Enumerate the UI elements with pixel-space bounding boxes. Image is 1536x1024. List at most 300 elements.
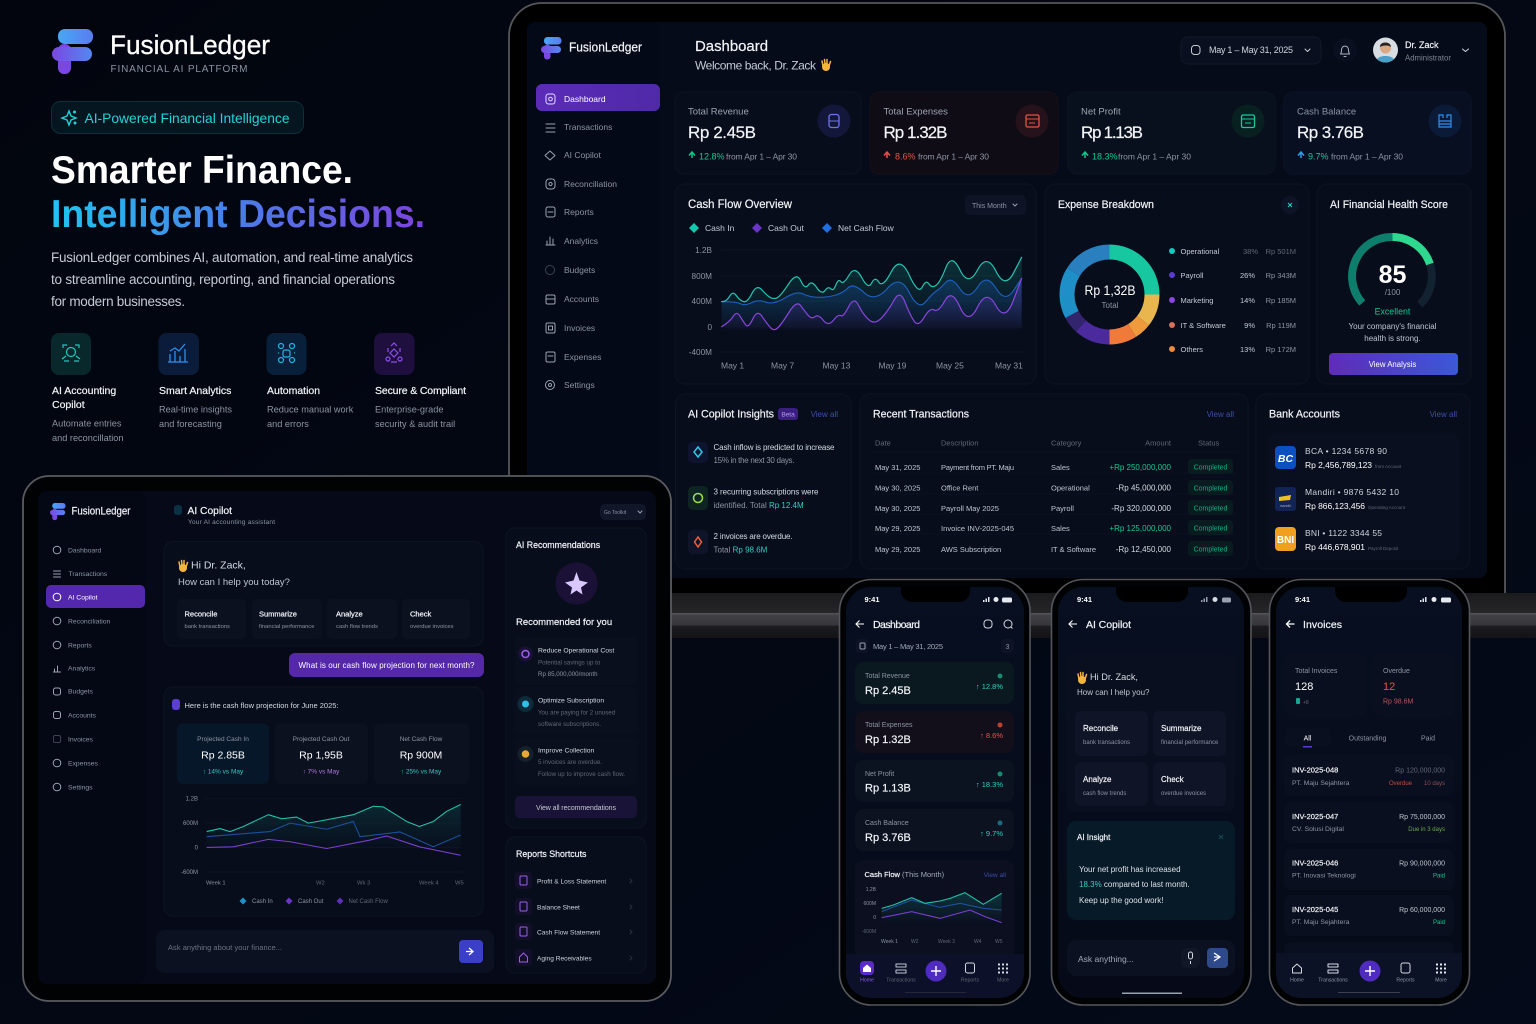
beta badge: Beta <box>781 412 795 418</box>
tablet nav list: AI Copilot <box>68 594 98 602</box>
invoice tabs: Paid <box>1421 736 1435 742</box>
tablet nav list: Analytics <box>68 666 96 672</box>
recommendation: subscription <box>515 687 637 735</box>
greeting card: Analyze <box>1083 775 1112 784</box>
panel: AI financial health score: Excellent <box>1375 306 1411 316</box>
tablet active nav <box>46 585 145 608</box>
dashboard header: Welcome back, Dr. Zack <box>695 58 817 72</box>
hero heading <box>51 149 425 236</box>
phone frame <box>1270 580 1470 1005</box>
status pills: Completed <box>1194 486 1228 492</box>
insight 1: 15% in the next 30 days. <box>714 456 794 465</box>
panel: bank accounts: Bank Accounts <box>1269 408 1340 420</box>
panel: AI copilot insights <box>676 394 851 569</box>
expense legend: Payroll <box>1180 271 1204 280</box>
table rows: +Rp 125,000,000 <box>1109 524 1172 533</box>
KPI: net profit: ↑ 18.3% <box>976 780 1003 789</box>
panel: cash flow overview: Cash Flow Overview <box>688 199 793 211</box>
x axis: May 31 <box>995 360 1023 370</box>
KPI: cash balance: 9.7% <box>1308 152 1329 162</box>
bank: BNI: BNI <box>1277 535 1294 546</box>
status icons <box>1420 597 1451 602</box>
mini x axis: W5 <box>995 939 1003 945</box>
feature: Automation: Reduce manual work <box>267 404 354 414</box>
tablet header: AI Copilot <box>188 505 232 517</box>
invoice 048: Overdue <box>1389 781 1413 787</box>
reports shortcuts panel: Aging Receivables <box>537 956 592 962</box>
date filter <box>1181 37 1321 64</box>
KPI: total expenses: Total Expenses <box>884 106 948 118</box>
phone: AI copilot: 9:41 <box>1077 595 1092 604</box>
bank: BCA: from Account <box>1375 464 1402 469</box>
tablet nav list: Settings <box>68 784 93 792</box>
nav list: Reports <box>564 207 594 217</box>
tab: reports <box>1396 963 1415 984</box>
KPI: total expenses: Total Expenses <box>865 722 913 729</box>
x axis: May 1 <box>721 360 744 370</box>
stat: net cash flow <box>374 724 469 784</box>
panel: AI financial health score: AI Financial Health Score <box>1330 199 1448 211</box>
panel: recent transactions: Recent Transactions <box>873 408 969 420</box>
greeting card: How can I help you? <box>1077 688 1150 697</box>
AI recommendations panel: Recommended for you <box>516 617 612 628</box>
quick action chips: overdue invoices <box>410 624 454 630</box>
stat: projected cash in <box>177 724 269 784</box>
stat: projected cash in: Projected Cash In <box>197 736 249 743</box>
tab: home <box>1290 964 1304 984</box>
stat: projected cash out: Rp 1,95B <box>299 750 343 762</box>
projection y axis <box>181 796 199 876</box>
brand tagline: FINANCIAL AI PLATFORM <box>110 64 248 75</box>
icon: automation <box>278 344 295 362</box>
tablet mockup <box>23 476 671 1001</box>
x axis: May 25 <box>936 360 964 370</box>
panel: AI copilot insights: AI Copilot Insights <box>688 408 774 420</box>
gauge <box>1352 237 1432 304</box>
stat: projected cash out <box>275 724 368 784</box>
quick action chips: Summarize <box>259 610 297 618</box>
intro paragraph: for modern businesses. <box>51 294 185 309</box>
table rows: Payment from PT. Maju <box>941 463 1014 472</box>
stat: overdue: 12 <box>1383 681 1395 693</box>
stat: projected cash out: ↑ 7% vs May <box>303 768 340 776</box>
tablet logo: FusionLedger <box>72 506 131 518</box>
projection legend: Net Cash Flow <box>348 899 389 905</box>
tab: reports: Reports <box>961 978 979 984</box>
bank: Mandiri <box>1275 487 1406 511</box>
tablet dropdown: Go Toolkit <box>604 510 627 516</box>
icon: expenses <box>1016 104 1048 138</box>
feature: Smart Analytics: Real-time insights <box>159 404 232 414</box>
user profile: Dr. Zack <box>1405 40 1439 50</box>
reports shortcuts panel <box>506 837 646 973</box>
KPI: net profit: 18.3% <box>1092 152 1118 162</box>
bank: BNI <box>1275 527 1399 552</box>
send button <box>459 940 483 963</box>
AI insight card: 18.3% compared to last month. <box>1079 880 1190 889</box>
invoice 048 <box>1284 755 1454 796</box>
chart legend: Cash Out <box>768 223 805 233</box>
icon: star <box>556 562 598 604</box>
intro paragraph: FusionLedger combines AI, automation, and real-time analytics <box>51 250 413 265</box>
date row <box>856 639 1014 653</box>
table header: Amount <box>1145 438 1172 448</box>
invoice tabs: Outstanding <box>1349 736 1386 742</box>
table rows: -Rp 45,000,000 <box>1116 484 1172 492</box>
panel: AI financial health score: /100 <box>1385 288 1401 297</box>
month dropdown: This Month <box>972 203 1007 210</box>
phone screen <box>1058 587 1244 998</box>
laptop mockup <box>490 3 1536 638</box>
tablet nav list <box>53 546 111 792</box>
feature: AI Accounting Copilot: and reconcillation <box>52 433 124 443</box>
icon: waving hand <box>179 560 188 572</box>
phone: AI copilot: AI Copilot <box>1086 619 1131 631</box>
table header: Description <box>941 438 979 448</box>
tablet nav list: Accounts <box>68 712 97 720</box>
view analysis button: View Analysis <box>1369 360 1416 369</box>
tablet logo <box>50 503 131 520</box>
reports shortcuts panel: Balance Sheet <box>537 904 580 912</box>
y axis: 1.2B <box>695 246 713 255</box>
intro paragraph <box>51 250 413 309</box>
stat: total invoices: +8 <box>1303 700 1309 706</box>
greeting card: financial performance <box>1161 740 1219 746</box>
invoice 047: INV-2025-047 <box>1292 812 1338 821</box>
recommendation: reduce cost <box>515 637 637 685</box>
x axis: May 7 <box>771 360 794 370</box>
y axis: 400M <box>692 297 712 306</box>
quick action chips: Reconcile <box>184 610 217 618</box>
date row: May 1 – May 31, 2025 <box>873 642 943 651</box>
y axis: -400M <box>689 348 712 357</box>
KPI: net profit: from Apr 1 – Apr 30 <box>1118 152 1191 162</box>
invoice 048: 10 days <box>1424 781 1445 787</box>
tablet dropdown <box>600 504 646 520</box>
logo icon <box>52 29 93 74</box>
phone: invoices: 9:41 <box>1295 595 1310 604</box>
stat: overdue: Rp 98.6M <box>1383 698 1414 706</box>
invoice 045: Rp 60,000,000 <box>1399 907 1445 914</box>
panel: AI financial health score: 85 <box>1379 261 1406 289</box>
nav list: Invoices <box>564 323 595 333</box>
status pills: Completed <box>1194 506 1228 512</box>
line chart <box>722 257 1022 330</box>
brand header <box>52 29 270 75</box>
KPI: total expenses: Rp 1.32B <box>865 734 911 746</box>
invoice tabs <box>1285 728 1435 748</box>
nav list: Expenses <box>564 352 601 362</box>
recommendation: collection <box>515 737 637 785</box>
phone: dashboard: Dashboard <box>873 619 920 631</box>
stat: net cash flow: Net Cash Flow <box>400 736 443 743</box>
KPI: total expenses <box>855 711 1014 753</box>
panel: expense breakdown: Expense Breakdown <box>1058 199 1154 211</box>
invoice 047 <box>1284 802 1454 843</box>
feature: Automation: Automation <box>267 385 320 397</box>
user profile <box>1372 37 1468 64</box>
KPI: total revenue <box>855 662 1014 704</box>
ask input: Ask anything... <box>1078 954 1134 964</box>
reports shortcuts panel: Reports Shortcuts <box>516 849 587 859</box>
AI insight card: Your net profit has increased <box>1079 865 1181 874</box>
greeting card: Check <box>1161 775 1185 784</box>
expense legend: IT & Software <box>1180 321 1226 330</box>
chart legend: Cash In <box>705 223 735 233</box>
stat: projected cash out: Projected Cash Out <box>293 736 350 743</box>
feature: Automation: and errors <box>267 419 309 429</box>
table rows: May 30, 2025 <box>875 504 920 513</box>
mini y axis: -600M <box>862 929 876 935</box>
hero heading: Smarter Finance. <box>51 149 353 192</box>
expense legend: Rp 501M <box>1266 247 1296 256</box>
reports shortcuts panel: Profit & Loss Statement <box>537 878 606 886</box>
table rows: Sales <box>1051 463 1070 472</box>
table rows: Payroll <box>1051 504 1074 513</box>
greeting card: overdue invoices <box>1161 791 1206 797</box>
tab: transactions <box>1318 964 1348 984</box>
avatar <box>1373 38 1398 62</box>
mini x axis: Week 1 <box>881 939 898 945</box>
nav list: AI Copilot <box>564 150 601 160</box>
stat: overdue <box>1372 653 1454 717</box>
feature: Secure & Compliant: Enterprise-grade <box>375 404 443 414</box>
user chat bubble <box>289 653 484 677</box>
nav list: Accounts <box>564 294 599 304</box>
bank: Mandiri: Mandiri • 9876 5432 10 <box>1305 487 1399 497</box>
stat: projected cash in: ↑ 14% vs May <box>203 768 244 776</box>
tablet frame <box>23 476 671 1001</box>
feature: Secure & Compliant: security & audit trail <box>375 419 455 429</box>
intro paragraph: to streamline accounting, reporting, and financial operations <box>51 272 395 287</box>
phone frame <box>840 580 1030 1005</box>
KPI: total expenses: from Apr 1 – Apr 30 <box>918 152 989 162</box>
status icons <box>983 597 1012 602</box>
KPI: cash balance: Rp 3.76B <box>1297 123 1364 142</box>
table rows: -Rp 320,000,000 <box>1111 504 1172 513</box>
recommendation: subscription: software subscriptions. <box>538 721 601 728</box>
quick action chips: Analyze <box>336 610 363 618</box>
invoice 048: Rp 120,000,000 <box>1395 768 1445 774</box>
expense legend: Operational <box>1180 247 1220 256</box>
back arrow <box>1286 620 1294 628</box>
table rows: +Rp 250,000,000 <box>1109 463 1172 472</box>
tab: home: Home <box>860 978 874 984</box>
KPI: cash balance: Cash Balance <box>1297 106 1356 118</box>
y axis: 800M <box>692 272 712 281</box>
KPI: cash balance: Rp 3.76B <box>865 832 911 844</box>
tablet nav list: Dashboard <box>68 548 101 554</box>
table rows: -Rp 12,450,000 <box>1116 545 1172 554</box>
KPI: net profit <box>1068 92 1275 174</box>
nav list: Budgets <box>564 265 595 275</box>
table header: Date <box>875 438 891 448</box>
insight 1: Cash inflow is predicted to increase <box>714 443 835 452</box>
tab: more: More <box>997 978 1009 984</box>
cash flow card <box>855 860 1014 960</box>
tab bar <box>1276 953 1462 998</box>
table rows: AWS Subscription <box>941 545 1001 554</box>
nav list: Dashboard <box>564 94 606 104</box>
table rows: Office Rent <box>941 484 979 492</box>
phone: invoices <box>1270 580 1470 1005</box>
quick action chips <box>177 599 470 639</box>
invoice 046: Rp 90,000,000 <box>1399 860 1445 868</box>
notch <box>901 587 970 602</box>
KPI: total revenue: Rp 2.45B <box>688 123 756 142</box>
feature: Secure & Compliant <box>374 333 466 429</box>
KPI: total expenses: ↑ 8.6% <box>980 731 1003 740</box>
expense legend: 26% <box>1240 271 1255 280</box>
expense legend: Marketing <box>1180 296 1213 305</box>
expense legend: 9% <box>1244 321 1255 330</box>
table rows: Payroll May 2025 <box>941 504 999 513</box>
tablet nav list: Reconciliation <box>68 618 111 626</box>
insight 2 <box>688 486 819 510</box>
recommendation: reduce cost: Potential savings up to <box>538 660 601 666</box>
KPI: net profit: Rp 1.13B <box>865 782 911 794</box>
header icons <box>984 620 1012 628</box>
nav list: Transactions <box>564 122 612 132</box>
recommendation: reduce cost: Reduce Operational Cost <box>538 648 614 654</box>
feature: AI Accounting Copilot: AI Accounting <box>52 385 116 397</box>
tablet nav list: Invoices <box>68 736 94 744</box>
view analysis button <box>1329 353 1458 375</box>
projection x axis: Wk 3 <box>357 880 370 886</box>
bank: BCA: Rp 2,456,789,123 <box>1305 460 1372 470</box>
expense legend: 13% <box>1240 345 1255 354</box>
invoice 047: CV. Solusi Digital <box>1292 826 1344 833</box>
table rows: Operational <box>1051 484 1090 492</box>
tab bar <box>846 954 1024 998</box>
status pills: Completed <box>1194 546 1228 554</box>
stat: overdue: Overdue <box>1383 668 1410 675</box>
projection x axis: W2 <box>316 880 325 886</box>
KPI: cash balance: ↑ 9.7% <box>980 829 1003 838</box>
sidebar <box>527 22 660 578</box>
insight 2: 3 recurring subscriptions were <box>714 488 819 496</box>
KPI: total expenses: Rp 1.32B <box>884 123 948 142</box>
KPI: total revenue: from Apr 1 – Apr 30 <box>726 152 797 162</box>
status pills: Completed <box>1194 526 1228 532</box>
y axis <box>689 246 713 357</box>
donut centre: Rp 1,32B <box>1084 282 1136 298</box>
invoice 045: PT. Maju Sejahtera <box>1292 919 1350 926</box>
phone screen <box>846 587 1024 998</box>
tab: more <box>997 964 1009 984</box>
expense legend: Rp 185M <box>1266 296 1296 305</box>
KPI: total revenue: 12.8% <box>699 152 725 162</box>
quick action chips: Check <box>410 610 432 618</box>
donut centre <box>1084 282 1136 310</box>
table rows: IT & Software <box>1051 545 1096 554</box>
mini x axis: W4 <box>974 939 982 945</box>
expense legend: 38% <box>1243 247 1258 256</box>
invoice 048: PT. Maju Sejahtera <box>1292 780 1350 787</box>
KPI: cash balance: from Apr 1 – Apr 30 <box>1331 152 1403 162</box>
tab: reports <box>961 963 979 984</box>
bank: BCA <box>1275 446 1402 470</box>
recommendation: collection: 5 invoices are overdue. <box>538 759 602 766</box>
donut centre: Total <box>1102 301 1119 310</box>
nav list: Settings <box>564 380 595 390</box>
KPI: total revenue <box>675 92 861 174</box>
x axis: May 13 <box>822 360 851 370</box>
AI answer card: Here is the cash flow projection for June 2025: <box>184 701 338 710</box>
feature: AI Accounting Copilot: Automate entries <box>52 418 122 428</box>
feature: Automation <box>266 333 354 429</box>
KPI: total revenue: Rp 2.45B <box>865 685 911 697</box>
projection x axis: W5 <box>455 880 464 886</box>
date filter: May 1 – May 31, 2025 <box>1209 45 1293 55</box>
KPI: cash balance: Cash Balance <box>865 820 909 827</box>
table rows <box>875 463 1172 554</box>
tab: home <box>860 961 874 984</box>
insight 1 <box>688 442 835 465</box>
stat: projected cash in: Rp 2.85B <box>201 750 245 762</box>
feature: Secure & Compliant: Secure & Compliant <box>375 385 466 397</box>
AI insight card: Keep up the good work! <box>1079 896 1164 905</box>
projection line chart <box>207 805 461 855</box>
projection legend: Cash Out <box>298 899 324 905</box>
feature: Smart Analytics <box>158 333 232 429</box>
bank: BNI: Rp 446,678,901 <box>1305 542 1365 552</box>
laptop base <box>490 593 1536 638</box>
cash flow card: Cash Flow (This Month) <box>864 870 945 879</box>
y axis: 0 <box>707 323 712 332</box>
AI insight card <box>1067 821 1235 920</box>
table rows: May 29, 2025 <box>875 524 920 533</box>
icon: secure <box>386 343 402 362</box>
KPI: total expenses: 8.6% <box>895 152 916 162</box>
bank: BNI: Payroll Deposit <box>1368 546 1399 551</box>
tab: reports: Reports <box>1396 978 1415 984</box>
beta badge <box>778 408 798 420</box>
phone frame <box>1052 580 1251 1005</box>
greeting card: Reconcile <box>1083 724 1119 733</box>
KPI: cash balance <box>1284 92 1471 174</box>
mic button <box>1181 948 1200 968</box>
KPI: net profit: Rp 1.13B <box>1081 123 1143 142</box>
panel: expense breakdown <box>1045 184 1309 384</box>
badge: AI-powered <box>52 102 304 134</box>
invoice tabs: All <box>1304 736 1312 742</box>
mini y axis <box>862 887 877 935</box>
tab: add <box>926 960 946 982</box>
chart legend <box>689 223 895 233</box>
chart legend: Net Cash Flow <box>838 223 895 233</box>
notifications bell <box>1333 38 1357 62</box>
invoice 047: Due in 3 days <box>1408 827 1445 833</box>
feature: AI Accounting Copilot: Copilot <box>52 399 85 411</box>
panel: bank accounts: View all <box>1430 410 1457 419</box>
panel: recent transactions: View all <box>1207 410 1234 419</box>
tablet nav list: Reports <box>68 642 92 650</box>
table rows: May 31, 2025 <box>875 463 920 472</box>
notch <box>1335 587 1407 602</box>
panel: AI financial health score <box>1317 184 1471 384</box>
expense legend: Others <box>1180 345 1203 354</box>
ask input <box>1067 940 1235 976</box>
sidebar logo: FusionLedger <box>569 40 643 54</box>
phone: dashboard <box>840 580 1030 1005</box>
chat input <box>156 930 494 973</box>
active nav item <box>536 84 660 111</box>
greeting card: Summarize <box>1161 724 1202 733</box>
tablet screen <box>38 491 656 984</box>
brand name: FusionLedger <box>110 30 270 60</box>
phone screen <box>1276 587 1462 998</box>
